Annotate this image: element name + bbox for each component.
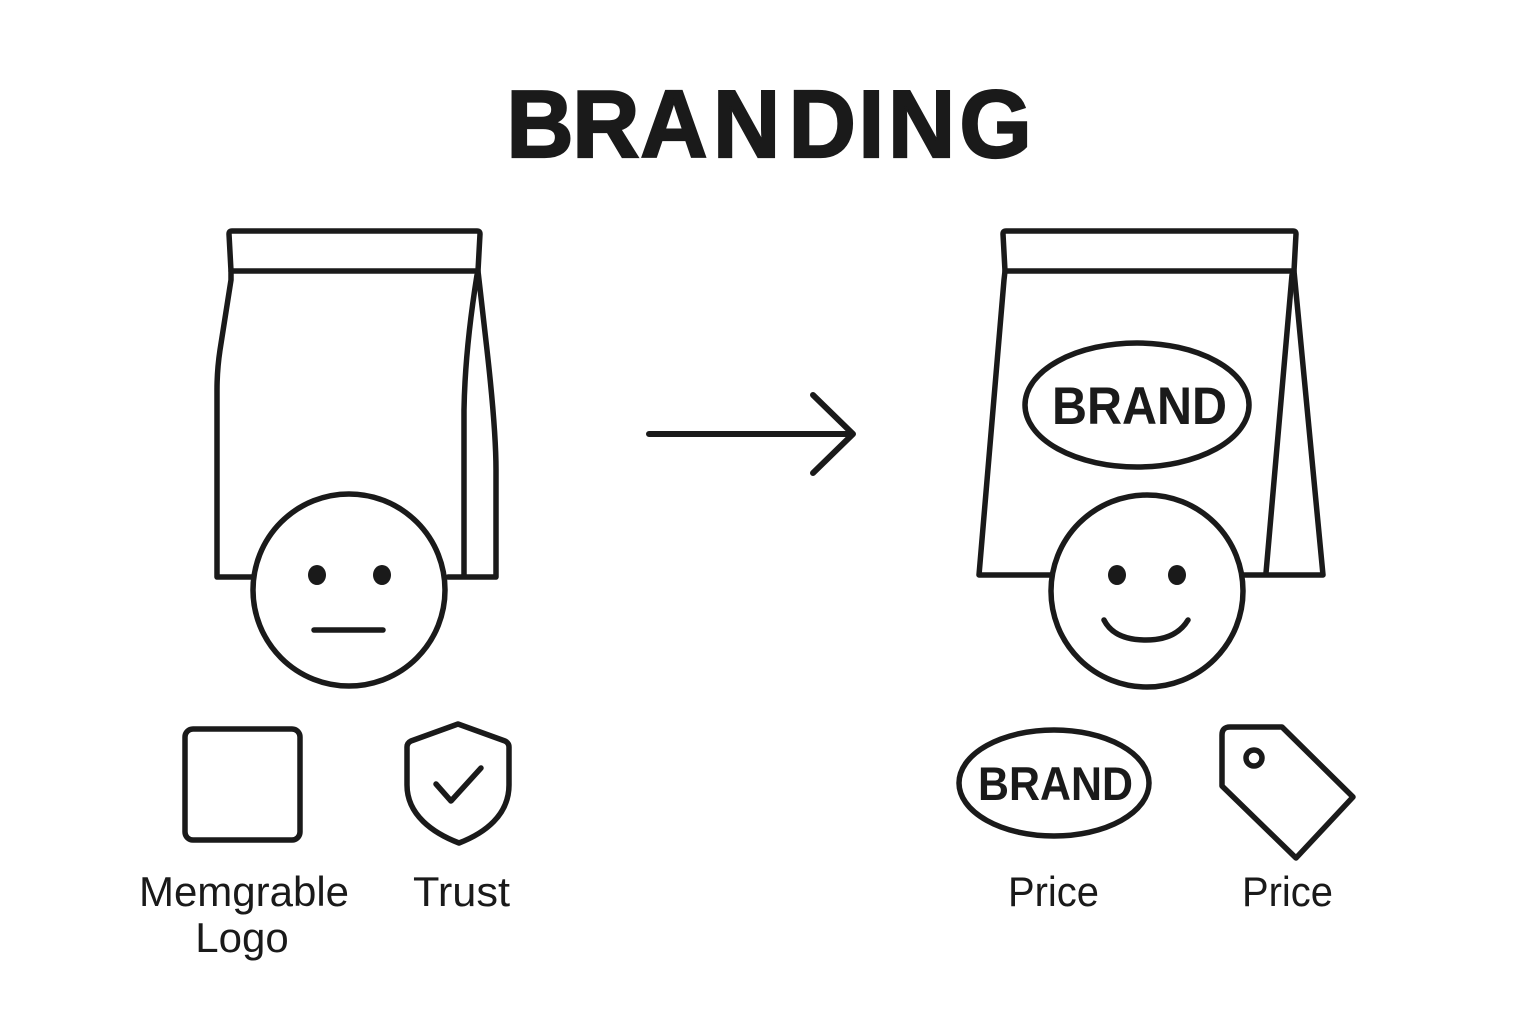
label: trust: Trust — [413, 868, 510, 915]
icon: price tag — [1222, 727, 1353, 858]
icon: brand oval: BRAND — [978, 757, 1133, 810]
label: memorable logo: Memgrable — [139, 868, 349, 915]
plain bag — [217, 231, 496, 577]
label: memorable logo — [139, 868, 349, 961]
icon: blank logo square — [185, 729, 300, 840]
label: price tag: Price — [1242, 868, 1333, 915]
arrow — [649, 395, 853, 473]
brand oval on bag: BRAND — [1052, 377, 1227, 436]
plain bag with neutral face — [217, 231, 496, 686]
happy face — [1051, 495, 1243, 687]
title: BRANDING — [506, 71, 1032, 178]
neutral face — [253, 494, 445, 686]
branded bag with happy face — [979, 231, 1323, 687]
icon: brand oval — [959, 730, 1149, 836]
icon: trust shield — [407, 724, 509, 843]
label: price: Price — [1008, 868, 1099, 915]
label: memorable logo: Logo — [195, 914, 289, 961]
branded bag — [979, 231, 1323, 575]
brand oval on bag — [1025, 343, 1249, 467]
